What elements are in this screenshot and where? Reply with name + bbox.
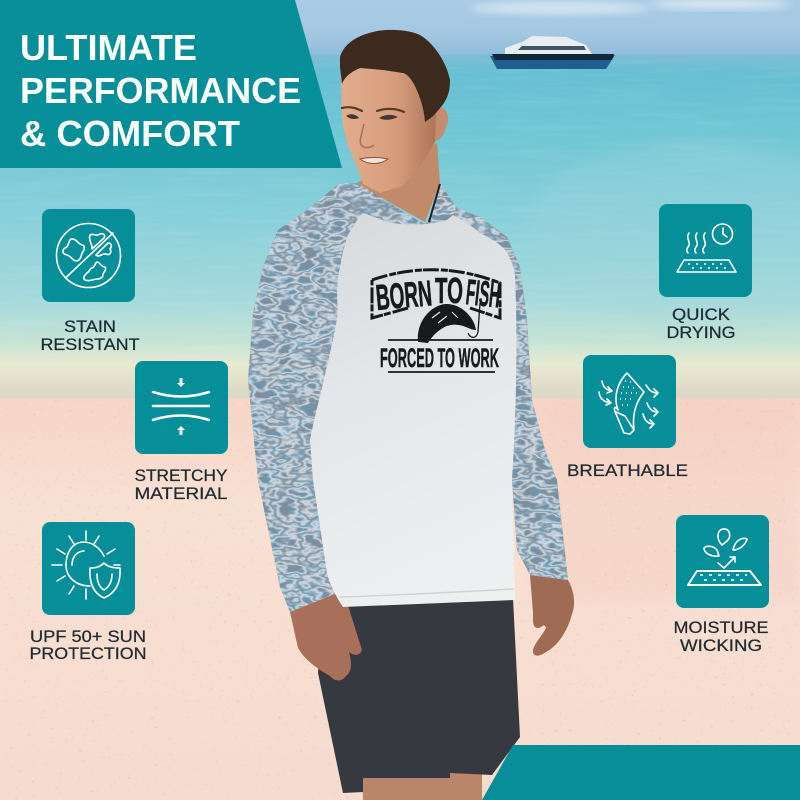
label: BREATHABLE: [567, 461, 688, 480]
shirt graphic: born to fish, forced to work: TO: [435, 270, 463, 311]
icon: fabric with steam and clock: [659, 204, 752, 297]
icon: compressing lines: [135, 361, 228, 454]
label: MOISTURE: [674, 618, 768, 637]
title: & COMFORT: [20, 113, 240, 154]
label: WICKING: [680, 636, 762, 655]
left hand: [290, 593, 362, 680]
feature: stretchy material: [134, 361, 228, 503]
head: [341, 60, 436, 193]
boat: [490, 36, 615, 69]
feature: breathable: [567, 355, 688, 480]
person wearing hooded shirt: [240, 30, 575, 800]
shirt body: [310, 213, 516, 607]
shorts: [318, 598, 520, 793]
bottom corner banner: [482, 745, 800, 800]
label: STRETCHY: [134, 466, 228, 485]
right hand: [530, 575, 574, 656]
icon: sun with shield: [42, 522, 135, 615]
hair: [340, 30, 450, 122]
ear: [432, 108, 448, 141]
shirt graphic: born to fish, forced to work: [372, 270, 502, 373]
label: UPF 50+ SUN: [30, 627, 146, 646]
label: QUICK: [672, 305, 731, 324]
shirt hem: [340, 589, 514, 597]
title banner: [0, 0, 342, 168]
legs: [362, 770, 482, 800]
shirt graphic: born to fish, forced to work: BORN: [374, 272, 433, 318]
person wearing hooded shirt: FISH: [464, 271, 502, 316]
facial features: [342, 107, 404, 164]
sleeves and hood: [240, 175, 575, 620]
title: [20, 27, 301, 154]
neck: [357, 143, 440, 222]
icon: fabric swatch with airflow: [583, 355, 676, 448]
person wearing hooded shirt: FORCED TO WORK: [380, 343, 499, 373]
feature: stain resistant: [40, 209, 140, 354]
label: RESISTANT: [40, 335, 140, 354]
title: ULTIMATE: [20, 27, 197, 68]
feature: UPF 50+ sun protection: [30, 522, 146, 663]
label: PROTECTION: [30, 644, 146, 663]
icon: stains crossed out: [42, 209, 135, 302]
label: STAIN: [64, 317, 116, 336]
icon: fabric with droplets: [676, 515, 769, 608]
label: MATERIAL: [134, 484, 228, 503]
feature: moisture wicking: [674, 515, 769, 655]
label: DRYING: [666, 323, 736, 342]
title: PERFORMANCE: [20, 70, 301, 111]
feature: quick drying: [659, 204, 752, 342]
